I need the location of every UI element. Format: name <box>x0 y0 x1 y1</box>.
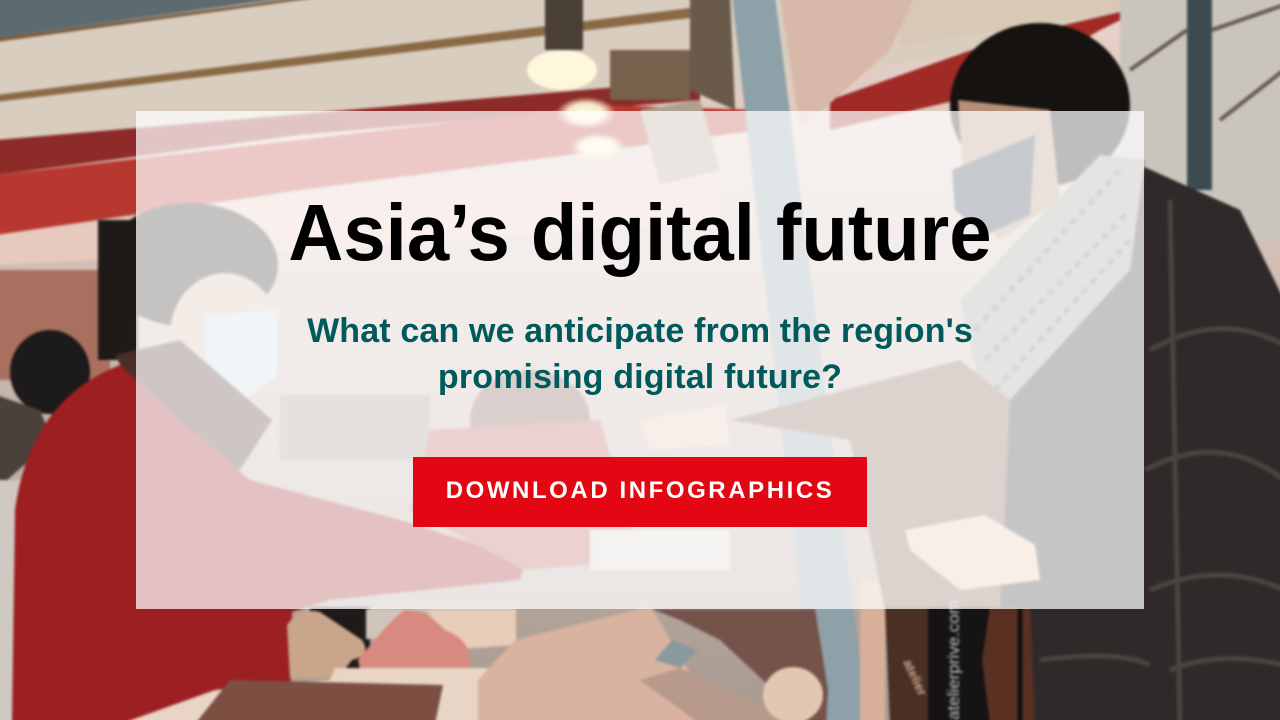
download button: DOWNLOAD INFOGRAPHICS <box>446 477 834 504</box>
subtitle <box>307 312 973 396</box>
title: Asia’s digital future <box>288 188 992 277</box>
download button <box>413 457 867 527</box>
background photo: market stall scene: atelierprive.com <box>944 600 963 720</box>
background photo: market stall scene: atelier <box>900 657 930 698</box>
subtitle: What can we anticipate from the region's <box>307 312 973 350</box>
translucent white panel <box>136 111 1144 609</box>
subtitle: promising digital future? <box>438 358 842 396</box>
